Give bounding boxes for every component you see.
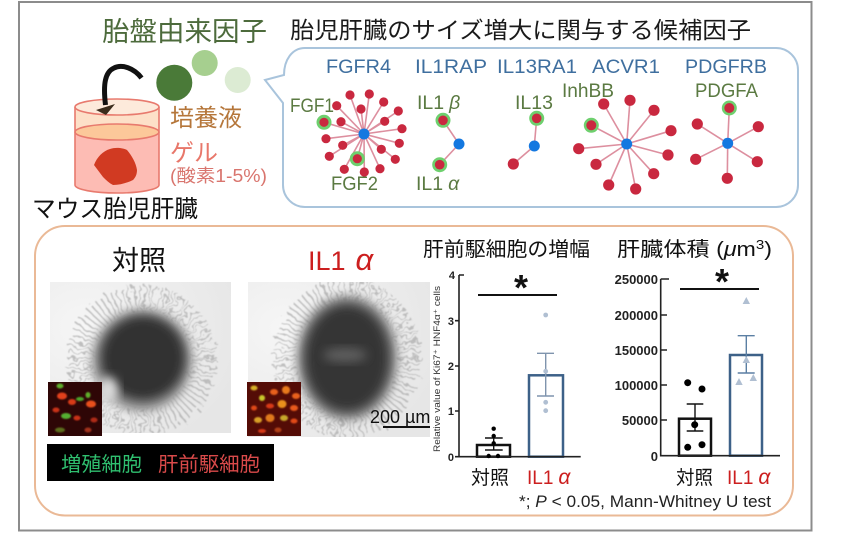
- label: oxygen: (酸素1-5%): [170, 166, 267, 186]
- panel: candidate factor callout: [265, 48, 798, 207]
- bar chart: liver volume: [615, 261, 780, 489]
- bar chart: liver volume: IL1α: [727, 466, 771, 489]
- ligand labels: FGF2: [331, 173, 378, 195]
- photo: control organoid: [50, 282, 231, 433]
- bar chart: liver volume: 0: [651, 449, 658, 464]
- heading: liver volume: ): [764, 239, 772, 261]
- network: FGFR4: [316, 89, 407, 177]
- bar chart: progenitor proliferation: IL1α: [527, 466, 571, 489]
- ligand labels: IL1 α: [416, 173, 460, 195]
- bar chart: liver volume: 200000: [615, 308, 658, 323]
- ligand labels: IL1 β: [417, 92, 460, 114]
- bar chart: progenitor proliferation: Relative value of Ki67⁺ HNF4α⁺ cells: [432, 286, 443, 452]
- legend: [47, 444, 274, 481]
- bar chart: liver volume: 50000: [622, 413, 658, 428]
- ligand labels: [290, 80, 758, 195]
- receptor labels: IL1RAP: [415, 56, 487, 78]
- inset: IL1 alpha fluorescence: [247, 382, 301, 436]
- label: medium: 培養液: [170, 105, 242, 132]
- network: IL13RA1: [508, 111, 544, 170]
- label: mouse fetal liver: マウス胎児肝臓: [32, 196, 198, 223]
- scale bar: 200 µm: [370, 407, 430, 427]
- bar chart: liver volume: *: [715, 261, 729, 302]
- ligand labels: InhBB: [562, 80, 614, 102]
- bar chart: liver volume: 100000: [615, 378, 658, 393]
- arrow: factors into medium: [96, 66, 142, 115]
- heading: progenitor proliferation: 肝前駆細胞の増幅: [423, 238, 590, 261]
- icon: factor circles: [156, 50, 251, 101]
- heading: liver volume: 肝臓体積 ( μm: [617, 239, 753, 261]
- heading: candidate factors: 胎児肝臓のサイズ増大に関与する候補因子: [290, 17, 751, 43]
- label: gel: ゲル: [170, 140, 218, 167]
- bar chart: progenitor proliferation: [432, 267, 581, 489]
- icon: culture beaker with liver: [75, 99, 159, 193]
- network: IL1RAP: [432, 113, 464, 172]
- ligand labels: FGF1: [290, 95, 334, 117]
- legend: 増殖細胞: [61, 453, 142, 476]
- bar chart: progenitor proliferation: *: [514, 267, 528, 308]
- ligand labels: PDGFA: [695, 80, 758, 102]
- bar chart: progenitor proliferation: 3: [448, 316, 454, 328]
- receptor labels: PDGFRB: [685, 56, 767, 78]
- panel: results: [35, 226, 793, 516]
- network: PDGFRB: [690, 100, 764, 184]
- photo: IL1 alpha organoid: [248, 282, 430, 437]
- receptor labels: IL13RA1: [497, 56, 577, 78]
- receptor labels: ACVR1: [592, 56, 660, 78]
- bar chart: liver volume: 対照: [676, 467, 713, 489]
- bar chart: progenitor proliferation: 1: [448, 406, 454, 418]
- ligand labels: IL13: [515, 92, 553, 114]
- bar chart: liver volume: 150000: [615, 343, 658, 358]
- inset: control fluorescence: [48, 382, 102, 436]
- bar chart: progenitor proliferation: 2: [448, 361, 454, 373]
- heading: IL1 alpha: IL1 α: [308, 242, 375, 277]
- receptor labels: [326, 56, 767, 78]
- bar chart: progenitor proliferation: 対照: [471, 467, 509, 489]
- legend: 肝前駆細胞: [158, 453, 260, 476]
- receptor labels: FGFR4: [326, 56, 391, 78]
- bar chart: progenitor proliferation: 0: [448, 452, 454, 464]
- network: ACVR1: [573, 95, 677, 195]
- heading: liver volume: 3: [756, 237, 764, 252]
- heading: placental factors: 胎盤由来因子: [102, 17, 267, 47]
- heading: control: 対照: [112, 246, 166, 276]
- footnote: *; P < 0.05, Mann-Whitney U test: [519, 493, 771, 511]
- bar chart: liver volume: 250000: [615, 272, 658, 287]
- bar chart: progenitor proliferation: 4: [449, 270, 456, 282]
